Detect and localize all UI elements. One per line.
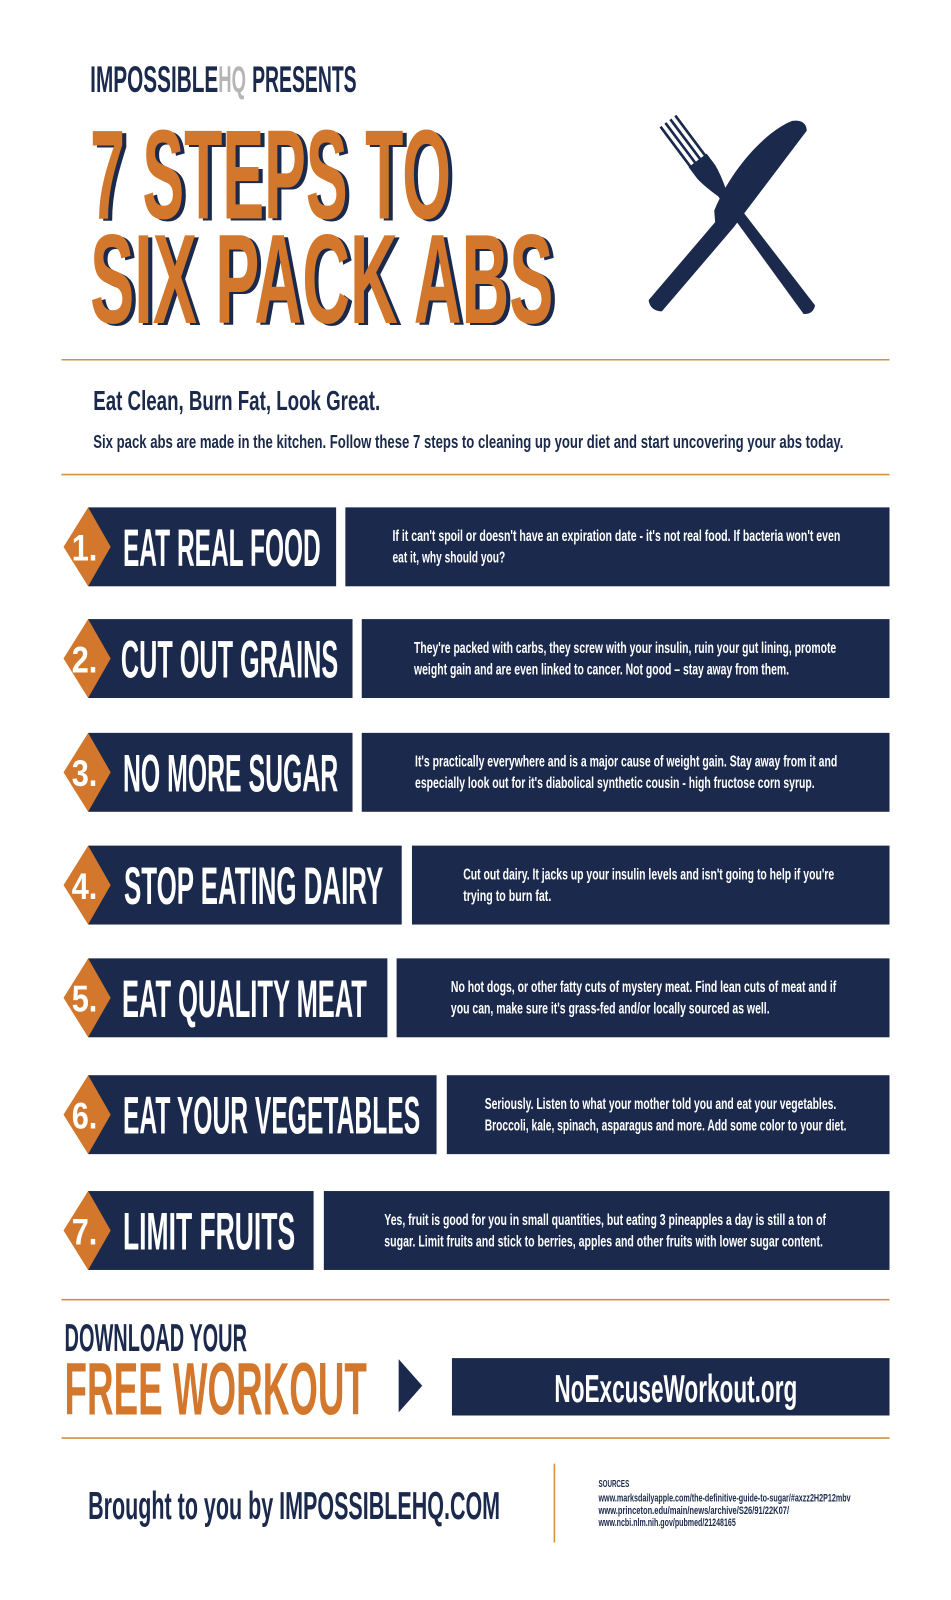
step 1 — [64, 507, 890, 586]
footer credit: Brought to you by IMPOSSIBLEHQ.COM — [88, 1485, 500, 1528]
step 3 — [64, 733, 890, 812]
step 5: you can, make sure it's grass-fed and/or locally sourced as well. — [451, 1001, 770, 1018]
arrow — [399, 1359, 422, 1412]
link button — [452, 1358, 890, 1416]
step 2: CUT OUT GRAINS — [121, 631, 338, 690]
step 7 — [64, 1191, 890, 1270]
step 4: STOP EATING DAIRY — [124, 857, 383, 916]
step 1: EAT REAL FOOD — [123, 519, 321, 578]
step 6: EAT YOUR VEGETABLES — [123, 1087, 420, 1146]
title — [90, 103, 557, 352]
header: presents: HQ — [218, 59, 246, 100]
step 1: 1. — [72, 528, 97, 569]
text: FREE WORKOUT — [65, 1347, 367, 1430]
intro heading: Eat Clean, Burn Fat, Look Great. — [93, 385, 380, 416]
header: presents: IMPOSSIBLE — [90, 59, 218, 100]
step 1: eat it, why should you? — [392, 550, 505, 567]
step 7: 7. — [72, 1211, 97, 1252]
step 7: LIMIT FRUITS — [123, 1202, 295, 1261]
sources: www.ncbi.nlm.nih.gov/pubmed/21248165 — [598, 1517, 736, 1529]
step 6: 6. — [72, 1096, 97, 1137]
title: 7 STEPS TO — [90, 103, 451, 245]
title: 7 STEPS TO — [94, 105, 455, 247]
step 3: 3. — [72, 753, 97, 794]
step 3: NO MORE SUGAR — [123, 744, 338, 803]
sources: SOURCES — [598, 1479, 629, 1490]
step 4: trying to burn fat. — [463, 888, 551, 905]
sources: www.princeton.edu/main/news/archive/S26/91/22K07/ — [598, 1505, 789, 1517]
step 5: EAT QUALITY MEAT — [122, 970, 367, 1029]
download heading — [65, 1317, 367, 1430]
step 2: weight gain and are even linked to cancer. Not good – stay away from them. — [413, 661, 789, 678]
step 6 — [64, 1075, 890, 1154]
step 5 — [64, 958, 890, 1037]
sources — [598, 1479, 851, 1529]
step 2 — [64, 619, 890, 698]
icon: fork and knife — [633, 109, 820, 319]
step 4: 4. — [72, 866, 97, 907]
step 5: 5. — [72, 979, 97, 1020]
step 2: 2. — [72, 639, 97, 680]
download heading: DOWNLOAD YOUR — [65, 1317, 247, 1360]
step 4 — [64, 846, 890, 925]
header: presents: PRESENTS — [252, 59, 357, 100]
